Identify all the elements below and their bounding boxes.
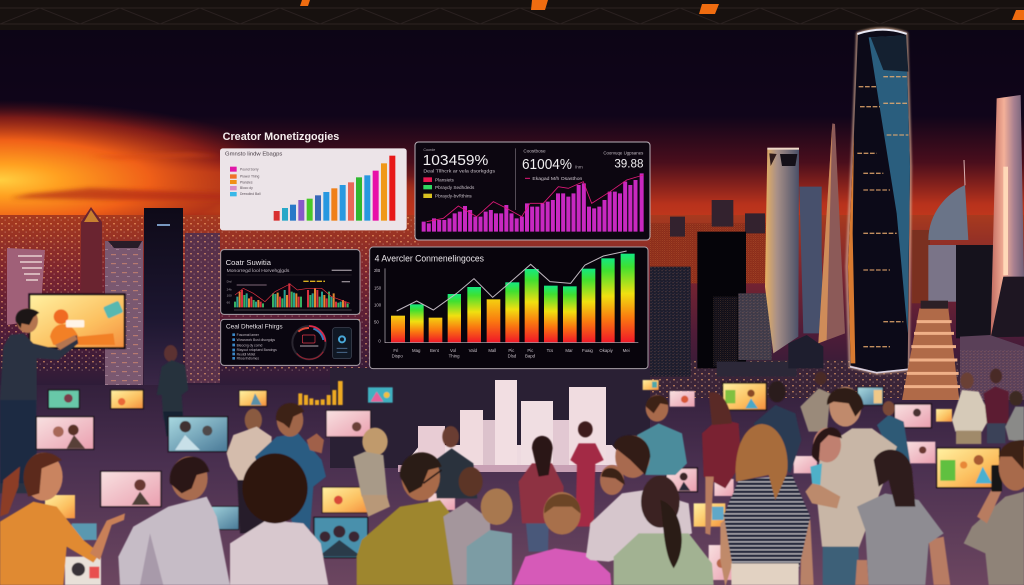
left skyline towers (0, 207, 420, 401)
panel: headline metrics with magenta chart: 103459% (423, 153, 488, 169)
panel: growth bar chart: Pluwor Thing (240, 174, 260, 178)
panel: creator results mini chart: Drd (227, 280, 232, 284)
stage building model (398, 380, 638, 472)
panel: creator results mini chart: 100 (227, 294, 232, 298)
panel: advertiser bar and line chart: 0 (378, 338, 381, 343)
man in mustard shirt (357, 452, 470, 585)
man in beige shirt with phone (805, 387, 897, 585)
panel: headline metrics with magenta chart (415, 142, 650, 240)
panel: headline metrics with magenta chart: 39.88 (614, 158, 644, 171)
panel: headline metrics with magenta chart: /nm (575, 165, 583, 170)
panel: advertiser bar and line chart: Tcs (547, 348, 553, 353)
standing man pointing at screen (0, 308, 78, 493)
panel: headline metrics with magenta chart: Coorde (423, 148, 435, 152)
small screens row (48, 387, 393, 409)
man in dark teal shirt (877, 401, 910, 463)
panel: growth bar chart (220, 148, 407, 230)
panel: digital formats with donut and phone: Reutdl Mdlet (237, 352, 255, 356)
woman with ponytail and orange shirt (0, 453, 125, 585)
panel: advertiser bar and line chart: Bapd (525, 353, 536, 358)
man in dark shirt watching (157, 345, 188, 437)
back wall between stage and skyline (330, 368, 650, 468)
child in blue shirt (467, 488, 513, 585)
panel: digital formats with donut and phone: Wowrwork Bust dlsorgdgs (237, 338, 275, 342)
panel: digital formats with donut and phone: Bleocng dy cornd (237, 343, 263, 347)
woman with striped top (720, 424, 814, 585)
panel: creator results mini chart (221, 250, 360, 314)
mini bar chart hologram (298, 381, 343, 405)
near skyline base on right (650, 360, 1024, 398)
person with curly dark hair (230, 453, 328, 585)
panel: advertiser bar and line chart: Mag (412, 348, 421, 353)
panel: digital formats with donut and phone: Rlayout nrloptaed Bandngs (237, 348, 277, 352)
woman in grey tee (855, 450, 950, 585)
background: city band (0, 215, 1024, 385)
panel: advertiser bar and line chart: Okapiy (599, 348, 614, 353)
panel: headline metrics with magenta chart: 61004% (522, 157, 572, 173)
screen: large presentation display (28, 293, 126, 349)
panel: growth bar chart: Plansles (240, 180, 253, 184)
man in dark suit (754, 381, 801, 473)
boy in magenta shirt (514, 492, 611, 585)
floor (0, 385, 1024, 585)
panel: advertiser bar and line chart: 150 (374, 285, 382, 290)
far man in grey (800, 372, 830, 432)
screen cluster (643, 380, 1000, 580)
man in teal shirt (637, 395, 687, 475)
back-row screens and people, right half (514, 369, 1024, 585)
panel: advertiser bar and line chart (370, 247, 648, 369)
panel: headline metrics with magenta chart: Plansiets (435, 178, 455, 183)
panel: digital formats with donut and phone: Rboa Ihdlomes (237, 357, 259, 361)
round striped tower (902, 301, 960, 400)
panel: creator results mini chart: 60 (227, 300, 230, 304)
panel: advertiser bar and line chart: Mei (623, 348, 630, 353)
teen in white shirt (586, 435, 692, 562)
dashboard panels (220, 131, 650, 369)
panel: headline metrics with magenta chart: Ekagad M/h Osasthon (532, 176, 583, 181)
man in maroon top (984, 369, 1009, 443)
man in white shirt foreground (118, 456, 230, 585)
woman in red outfit (570, 421, 604, 527)
panel: headline metrics with magenta chart: Pbraydy Sedhdeds (435, 185, 475, 190)
panel: headline metrics with magenta chart: Deal Tllhcrk ar vela dsorkgdgs (423, 168, 496, 174)
small child with dark hair (600, 465, 625, 495)
small man behind (443, 467, 492, 585)
woman in burgundy dress (702, 392, 741, 535)
background: sunset sky (0, 0, 1024, 240)
panel: advertiser bar and line chart: Fuaig (582, 348, 593, 353)
man on right edge holding phone (964, 440, 1024, 585)
panel: creator results mini chart: Coatr Suwitia (226, 260, 271, 267)
panel: advertiser bar and line chart: Fri (393, 348, 398, 353)
girl with dark ponytail in green shirt (614, 476, 714, 585)
panel: advertiser bar and line chart: Vol (450, 348, 456, 353)
panel: advertiser bar and line chart: Mar (565, 348, 573, 353)
panel: advertiser bar and line chart: Pic (508, 348, 515, 353)
panel: advertiser bar and line chart: 50 (374, 320, 379, 325)
man in blue jacket (255, 403, 326, 530)
woman in red top (519, 436, 564, 552)
panel: advertiser bar and line chart: 4 Avercler Conmenelingoces (375, 253, 484, 263)
man in white shirt from behind (227, 409, 272, 533)
panel: advertiser bar and line chart: 100 (374, 303, 382, 308)
panel: digital formats with donut and phone: Fosomat lamer (237, 333, 260, 337)
panel: headline metrics with magenta chart: Coorvuqe Ugpsanes (603, 150, 644, 155)
girl beside him (810, 427, 842, 485)
dashboard title: Creator Monetizgogies (223, 131, 339, 143)
panel: advertiser bar and line chart: Dlsd (508, 353, 517, 358)
panel: headline metrics with magenta chart: Pbraydy-bvRthins (435, 193, 472, 198)
main twisted glass tower (847, 29, 911, 373)
screen cluster (36, 410, 455, 585)
man in dark jacket near model (433, 426, 477, 498)
panel: growth bar chart: Gmnsto lindw Ebagps (225, 152, 282, 158)
back-row screens and people, left half (0, 293, 513, 585)
right skyline towers (650, 95, 1024, 400)
panel: growth bar chart: Bloco dy (240, 186, 253, 190)
panel: advertiser bar and line chart: Pic (527, 348, 534, 353)
panel: advertiser bar and line chart: Vald (469, 348, 478, 353)
man in cream top (952, 373, 990, 444)
panel: creator results mini chart: 24b (227, 288, 232, 292)
blonde woman (353, 428, 390, 517)
panel: advertiser bar and line chart: 2lB (374, 268, 380, 273)
person far right (1005, 391, 1024, 442)
panel: advertiser bar and line chart: Dispo (392, 353, 403, 358)
panel: growth bar chart: Drewdind Ball (240, 192, 261, 196)
panel: growth bar chart: Pound Sorry (240, 167, 259, 171)
panel: creator results mini chart: Monorregd lool Horvehg|gds (227, 268, 289, 273)
panel: headline metrics with magenta chart: Coostbose (523, 149, 546, 154)
panel: advertiser bar and line chart: Mall (488, 348, 496, 353)
panel: digital formats with donut and phone (221, 319, 360, 365)
panel: advertiser bar and line chart: Thing (449, 353, 460, 358)
ceiling truss with stage lights (0, 0, 1024, 30)
panel: digital formats with donut and phone: Ceal Dhetkal Fhirgs (226, 324, 283, 331)
panel: advertiser bar and line chart: Bent (430, 348, 440, 353)
